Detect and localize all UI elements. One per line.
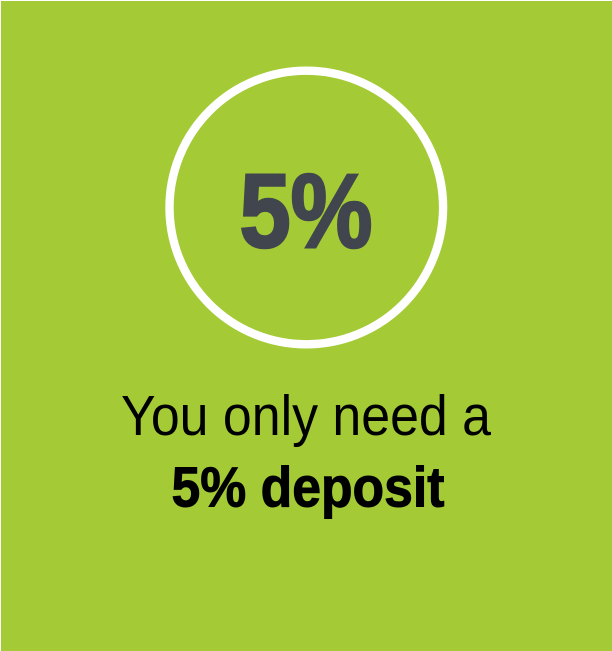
caption line 2: 5% deposit <box>172 456 445 520</box>
caption <box>121 384 491 520</box>
white ring <box>169 71 443 344</box>
big percentage: 5% <box>240 153 372 270</box>
caption line 1: You only need a <box>121 384 491 448</box>
circle badge <box>169 71 443 344</box>
